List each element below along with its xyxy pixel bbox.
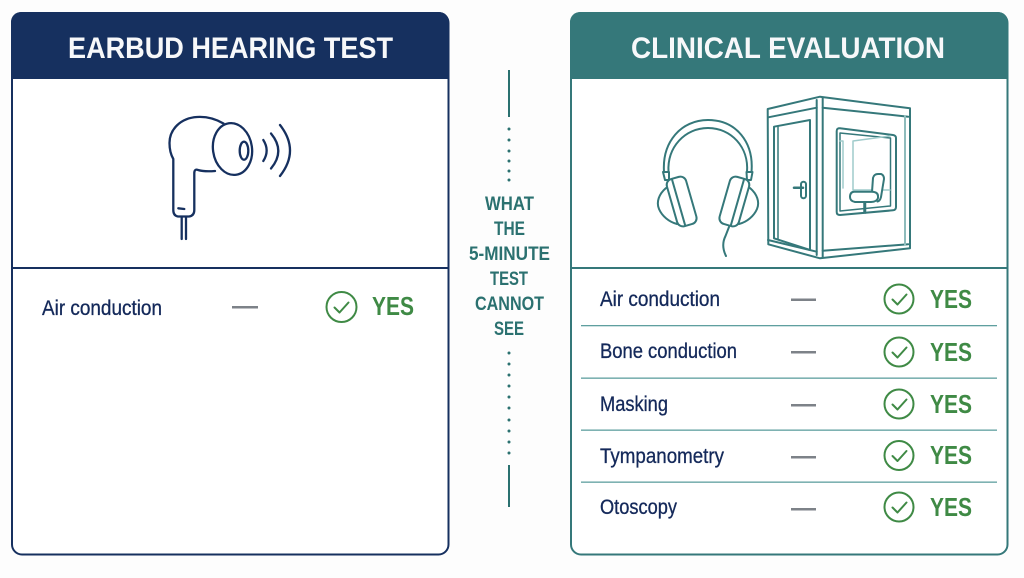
row: masking [581, 389, 997, 431]
row: tympanometry: Tympanometry [600, 445, 724, 468]
divider and row: air conduction [11, 267, 449, 322]
heading: earbud hearing test: EARBUD HEARING TEST [68, 32, 393, 65]
row: bone conduction [581, 337, 997, 379]
icon: headphones [658, 120, 758, 256]
dash [232, 306, 258, 308]
center label [469, 194, 550, 340]
status: yes: YES [372, 291, 414, 321]
header bar: clinical evaluation [570, 12, 1008, 79]
center label: 5-MINUTE [469, 244, 550, 265]
row: air conduction: Air conduction [600, 288, 720, 311]
label: air conduction: Air conduction [42, 297, 162, 320]
header bar: earbud hearing test [11, 12, 449, 79]
row: tympanometry [581, 440, 997, 483]
center divider: what the 5-minute test cannot see [469, 70, 550, 507]
center label: WHAT [485, 194, 534, 215]
icon: check [326, 292, 356, 322]
heading: clinical evaluation: CLINICAL EVALUATION [631, 32, 945, 65]
row: otoscopy [600, 492, 972, 522]
center label: THE [494, 219, 525, 240]
row: bone conduction: Bone conduction [600, 340, 737, 363]
row: tympanometry: YES [930, 440, 972, 470]
row: air conduction: YES [930, 284, 972, 314]
row: otoscopy: Otoscopy [600, 496, 677, 519]
center label: TEST [490, 269, 528, 290]
divider: header row [570, 267, 1008, 269]
row: masking: YES [930, 389, 972, 419]
icon: sound booth with chair [768, 97, 910, 258]
icon: earbud with sound waves [170, 117, 290, 239]
dotted connector: upper [508, 128, 510, 182]
center label: SEE [494, 319, 524, 340]
center label: CANNOT [475, 294, 544, 315]
row: masking: Masking [600, 393, 668, 416]
panel: earbud hearing test [11, 12, 449, 554]
row: air conduction [581, 284, 997, 326]
panel: clinical evaluation [570, 12, 1008, 554]
dotted connector: lower [508, 352, 510, 454]
row: bone conduction: YES [930, 337, 972, 367]
row: otoscopy: YES [930, 492, 972, 522]
